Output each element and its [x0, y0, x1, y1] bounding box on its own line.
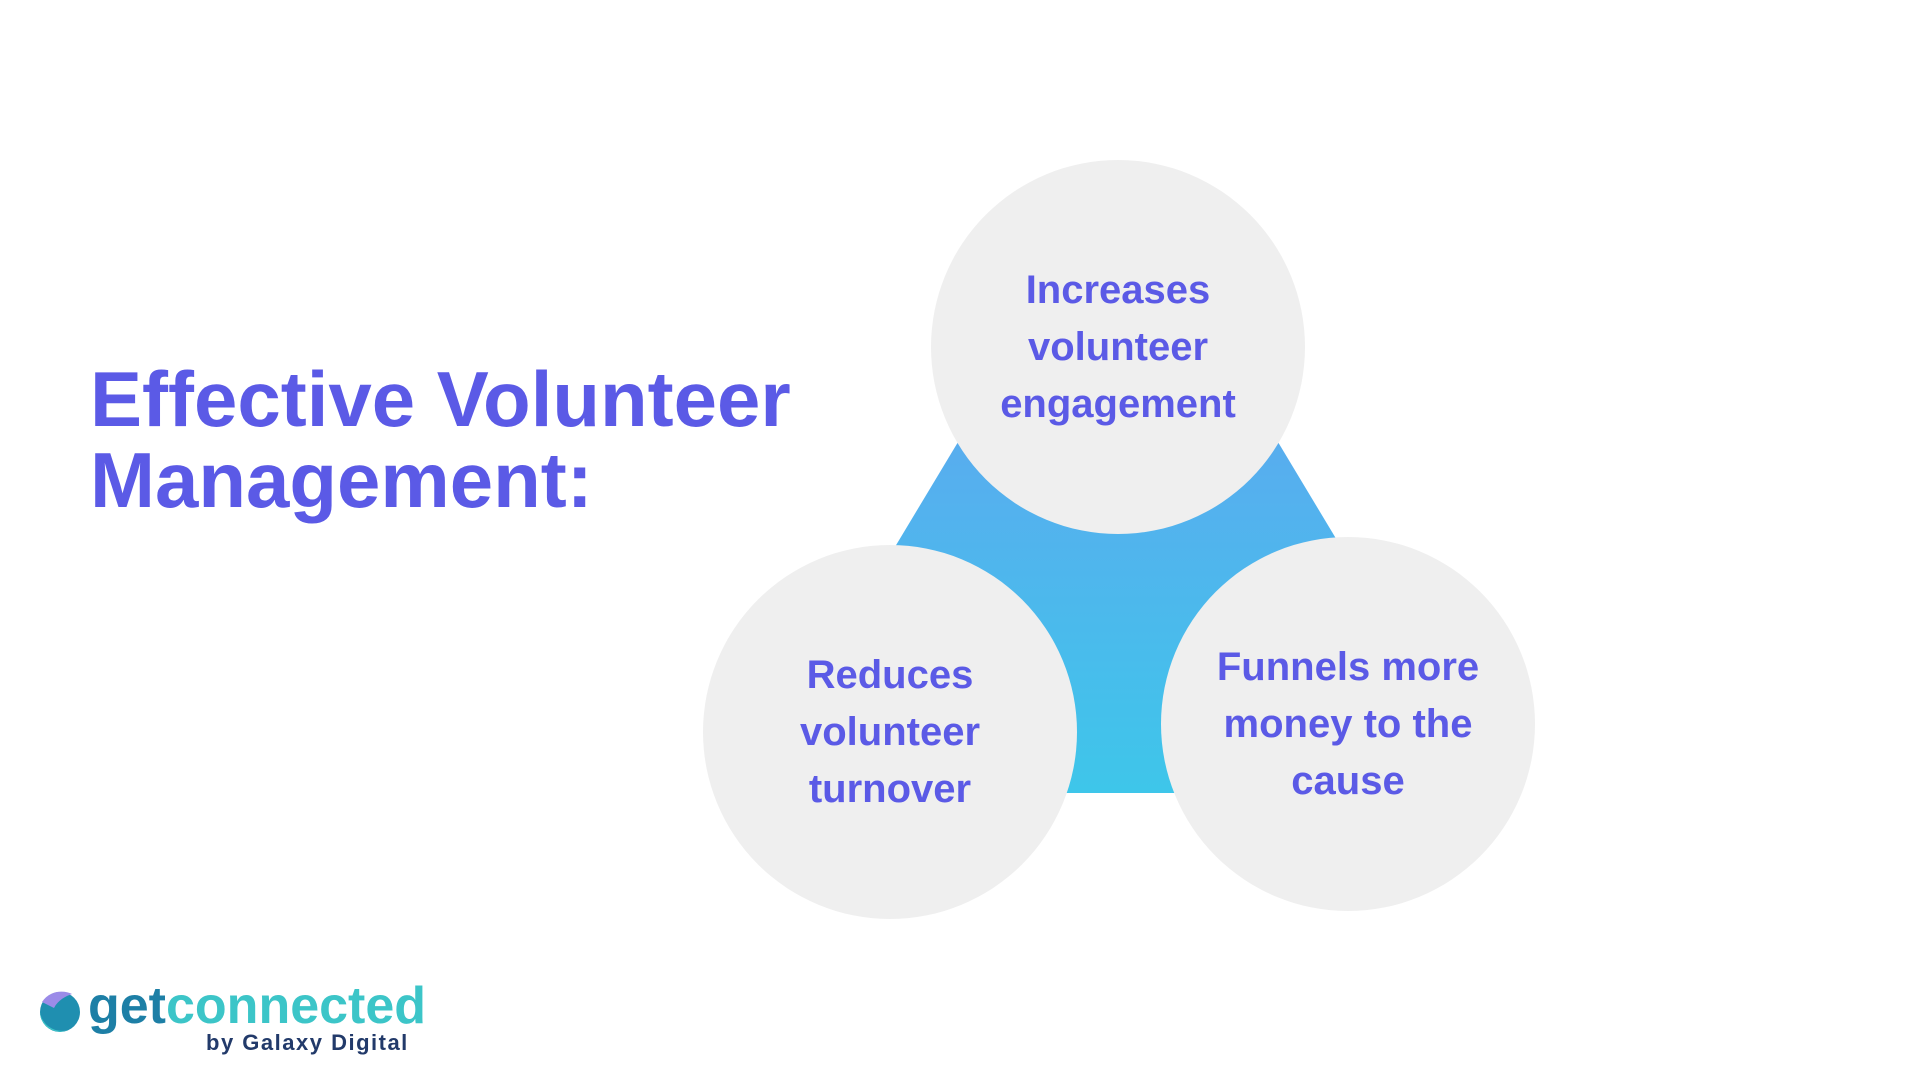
title: Effective Volunteer — [90, 355, 791, 443]
circle: engagement: volunteer — [1028, 324, 1208, 368]
logo: by Galaxy Digital — [206, 1030, 409, 1055]
circle: engagement: engagement — [1000, 382, 1236, 426]
icon: logo mark — [40, 992, 80, 1032]
circle: money: Funnels more — [1217, 644, 1479, 688]
circle: turnover: turnover — [809, 766, 971, 810]
circle: turnover: Reduces — [807, 652, 973, 696]
circle: money — [1161, 537, 1535, 911]
circle: turnover: volunteer — [800, 710, 980, 754]
circle: turnover — [703, 545, 1077, 919]
circle: engagement: Increases — [1026, 268, 1210, 312]
circle: engagement — [931, 160, 1305, 534]
circle: money: money to the — [1224, 702, 1472, 746]
logo text: getconnected — [88, 977, 426, 1035]
title: Management: — [90, 436, 593, 524]
circle: money: cause — [1291, 758, 1405, 802]
logo — [40, 977, 426, 1055]
title — [90, 355, 791, 524]
